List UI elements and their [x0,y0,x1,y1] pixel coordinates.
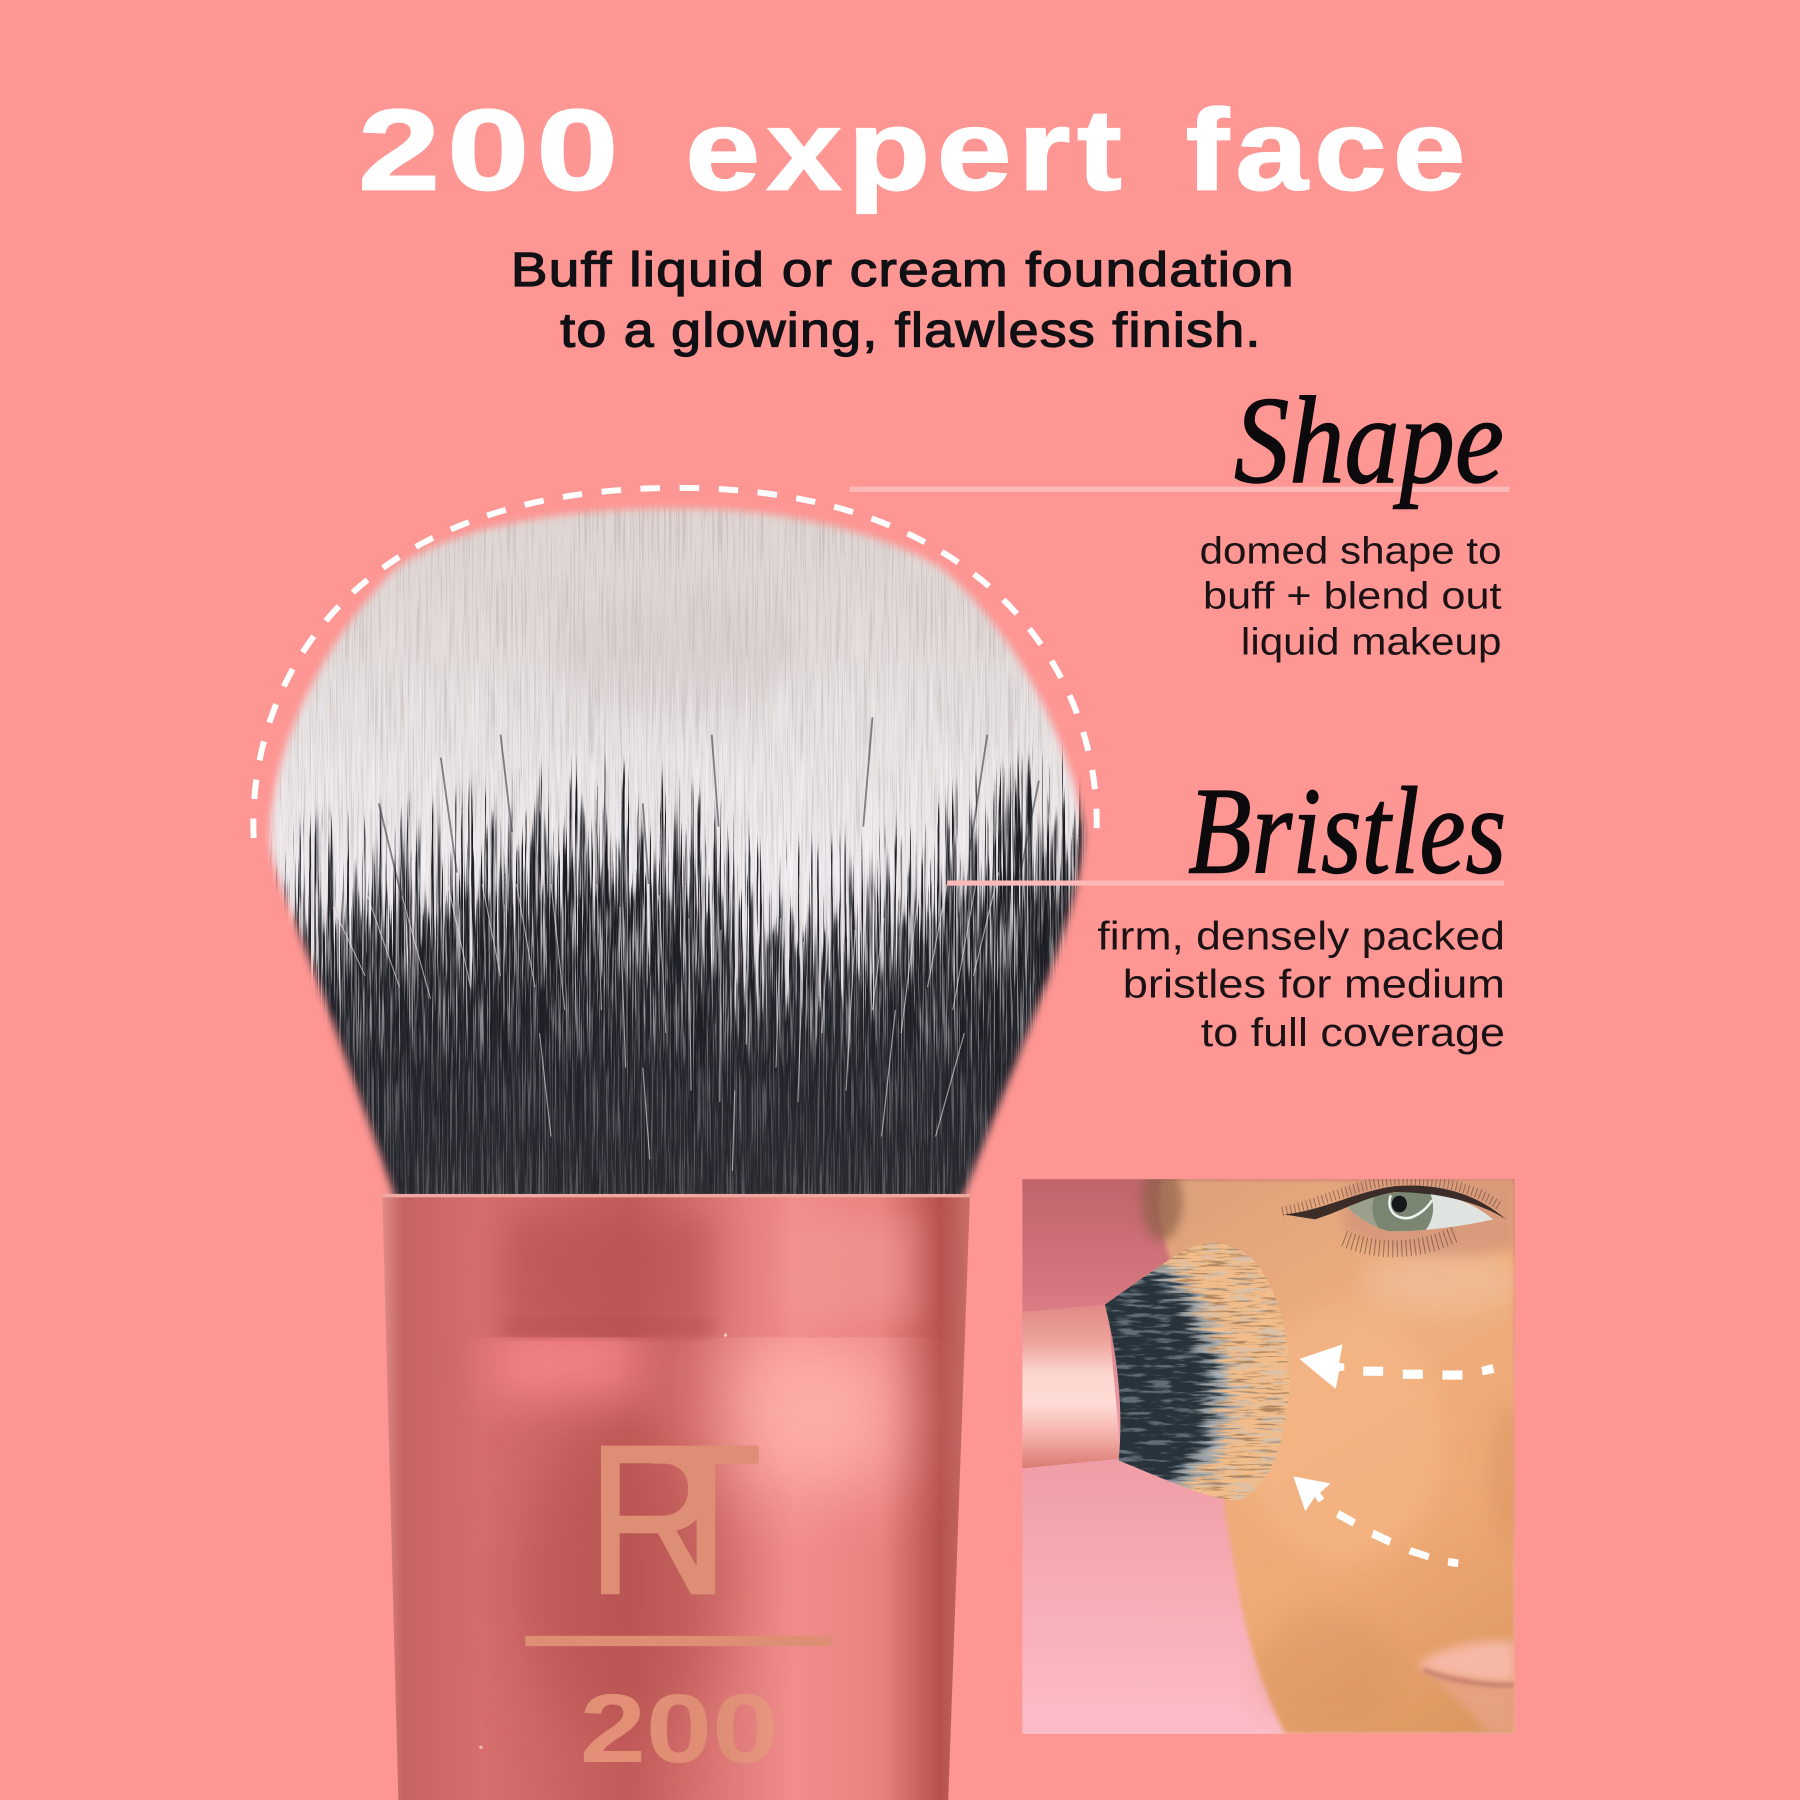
ferrule divider line [525,1636,831,1646]
arrow: upper [1299,1344,1494,1389]
eye [1282,1174,1515,1256]
ferrule model number: 200 [580,1674,778,1783]
brush bristles [265,504,1089,1196]
subtitle: to a glowing, flawless finish. [560,304,1262,358]
title: 200 [358,86,626,214]
lips [1418,1641,1515,1734]
callout line: shape [849,487,1510,492]
title: expert [685,86,1128,214]
text: bristles description: bristles for medium [1123,962,1505,1007]
text: bristles description: to full coverage [1201,1010,1505,1055]
heading: Bristles: Bristles [1188,762,1506,899]
text: bristles description: firm, densely packed [1097,913,1505,958]
text: shape description: liquid makeup [1241,621,1502,663]
text: shape description: domed shape to [1200,531,1502,573]
ferrule logo: RT: R [587,1401,720,1639]
mini brush [1022,1243,1290,1500]
arrow: lower [1293,1476,1459,1567]
heading: Shape: Shape [1234,372,1504,509]
subtitle: Buff liquid or cream foundation [511,243,1295,297]
text: shape description: buff + blend out [1203,575,1502,617]
text: shape description [1200,531,1502,663]
photo: brush applied to cheek [1022,1164,1537,1734]
subtitle [511,243,1295,358]
ferrule logo: RT: T [650,1401,762,1639]
brush ferrule [379,1194,976,1800]
callout line: bristles [947,880,1504,886]
title [358,86,1472,214]
text: bristles description [1097,913,1505,1055]
title: face [1186,86,1472,214]
dashed dome outline [253,488,1097,838]
